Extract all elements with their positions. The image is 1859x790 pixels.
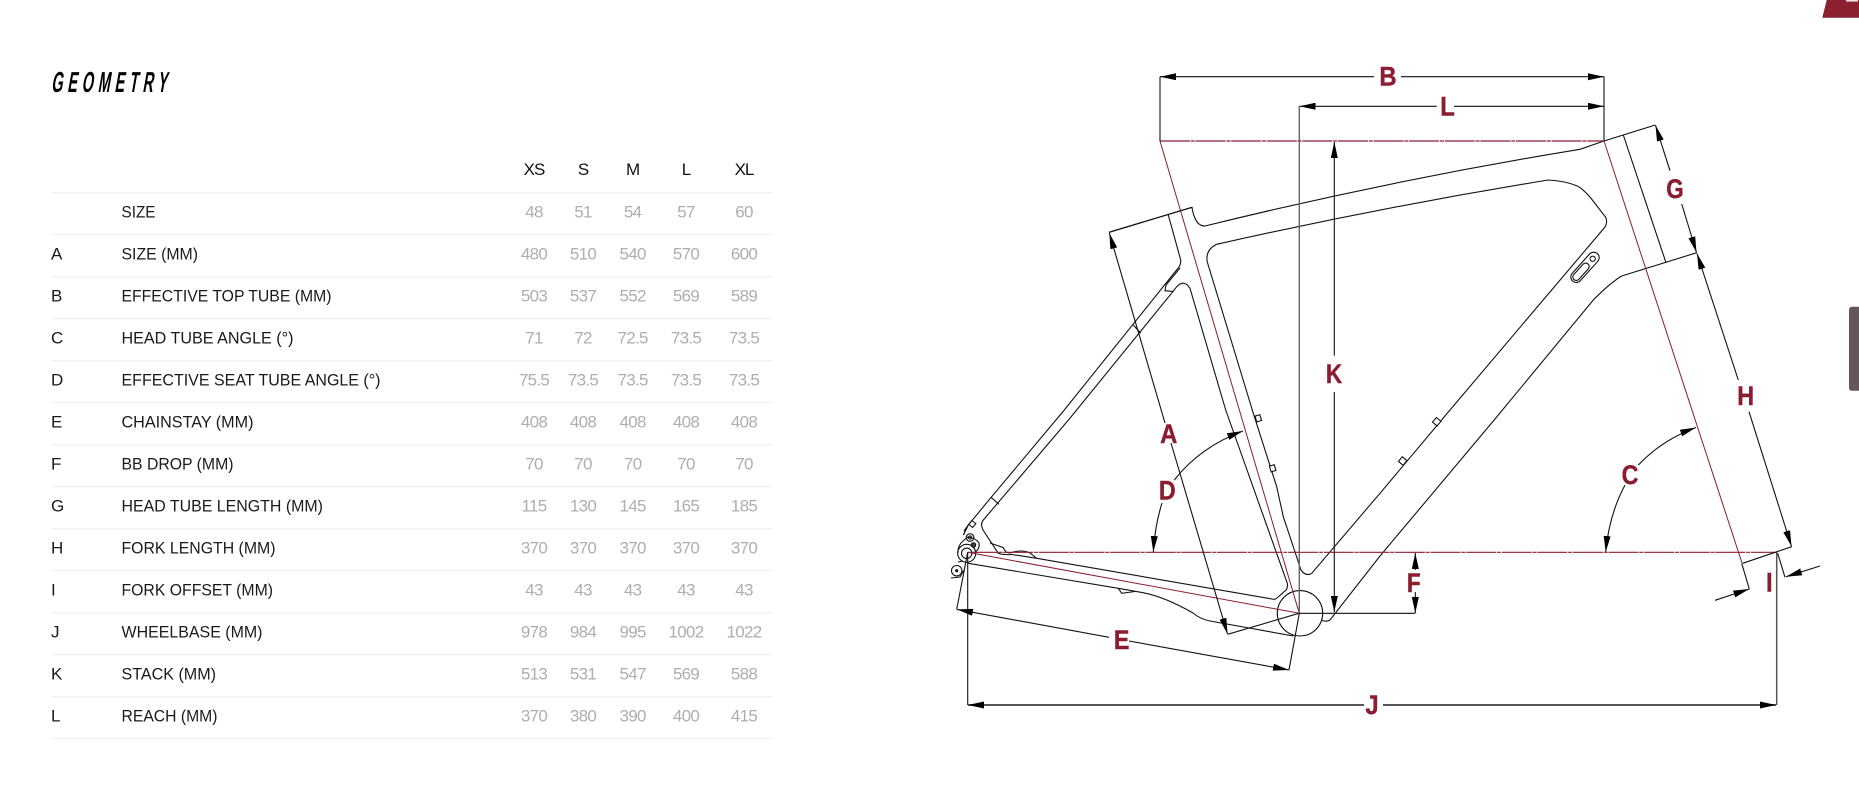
bike frame outline <box>964 125 1697 636</box>
row: J: 984 <box>570 622 596 641</box>
row: D: D <box>51 370 63 389</box>
table header: sizes: L <box>682 160 691 179</box>
row: C: 72 <box>574 328 592 347</box>
rear dropout <box>951 520 979 578</box>
row: C: C <box>51 328 63 347</box>
dimension F: F <box>1407 569 1421 598</box>
row: K <box>51 664 757 683</box>
dimension I <box>1715 547 1820 600</box>
row: C: HEAD TUBE ANGLE (°) <box>122 328 294 347</box>
title: GEOMETRY <box>50 66 176 98</box>
row: L: L <box>51 706 60 725</box>
row: A: 510 <box>570 244 596 263</box>
row: C <box>51 328 759 347</box>
row: K: 531 <box>570 664 596 683</box>
row: size: 60 <box>735 202 753 221</box>
row: G: 185 <box>731 496 757 515</box>
bottle bosses <box>1255 415 1441 472</box>
row: J: 1002 <box>668 622 704 641</box>
row: L: 380 <box>570 706 596 725</box>
dimension C <box>1606 428 1696 552</box>
row: E: 408 <box>521 412 547 431</box>
dimension D <box>1153 431 1243 552</box>
dimension F <box>1299 553 1421 613</box>
row: I: 43 <box>735 580 753 599</box>
table header: sizes: S <box>578 160 589 179</box>
dimension I: I <box>1766 569 1773 598</box>
row: K: 588 <box>731 664 757 683</box>
row: F: 70 <box>735 454 753 473</box>
row: I: 43 <box>525 580 543 599</box>
row: K: K <box>51 664 63 683</box>
row: E: 408 <box>673 412 699 431</box>
row: D: 73.5 <box>671 370 701 389</box>
row: D: 73.5 <box>729 370 759 389</box>
row: H <box>51 538 757 557</box>
row: C: 73.5 <box>729 328 759 347</box>
row: G: 130 <box>570 496 596 515</box>
row: A <box>51 244 757 263</box>
row: J: WHEELBASE (MM) <box>122 622 262 641</box>
dimension A: A <box>1160 420 1177 449</box>
row: F: 70 <box>624 454 642 473</box>
row: E <box>51 412 757 431</box>
row: D <box>51 370 759 389</box>
row: F: 70 <box>574 454 592 473</box>
row: C: 73.5 <box>671 328 701 347</box>
dimension G <box>1656 125 1696 252</box>
row: G: 165 <box>673 496 699 515</box>
row: L: 400 <box>673 706 699 725</box>
row: D: EFFECTIVE SEAT TUBE ANGLE (°) <box>122 370 380 389</box>
dimension B <box>1160 62 1604 141</box>
row: L: 390 <box>619 706 646 725</box>
row: H: 370 <box>619 538 646 557</box>
red centre lines <box>968 141 1777 613</box>
row: G: HEAD TUBE LENGTH (MM) <box>122 496 323 515</box>
row: B: 552 <box>619 286 646 305</box>
row: K: STACK (MM) <box>122 664 216 683</box>
dimension H <box>1697 254 1792 546</box>
row: J: J <box>51 622 60 641</box>
row: size <box>122 202 753 221</box>
row: L: 370 <box>521 706 547 725</box>
row: B: 569 <box>673 286 699 305</box>
row: L: 415 <box>731 706 757 725</box>
row: H: 370 <box>521 538 547 557</box>
dimension K: K <box>1326 360 1342 389</box>
row: G: G <box>51 496 64 515</box>
row: B: EFFECTIVE TOP TUBE (MM) <box>122 286 332 305</box>
row: B: B <box>51 286 62 305</box>
row: A: SIZE (MM) <box>122 244 198 263</box>
row: size: SIZE <box>122 202 156 221</box>
table header: sizes <box>524 160 754 179</box>
row: J <box>51 622 762 641</box>
dimension L: L <box>1440 92 1455 122</box>
row: I: I <box>51 580 56 599</box>
dimension D: D <box>1159 476 1176 506</box>
table header: sizes: XS <box>524 160 545 179</box>
row: I: 43 <box>624 580 642 599</box>
row: I: 43 <box>677 580 695 599</box>
row: G <box>51 496 757 515</box>
row: H: FORK LENGTH (MM) <box>122 538 276 557</box>
row: F: 70 <box>677 454 695 473</box>
row: F: BB DROP (MM) <box>122 454 234 473</box>
dimension G: G <box>1666 175 1684 204</box>
row: J: 978 <box>521 622 547 641</box>
row: E: 408 <box>731 412 757 431</box>
row: A: A <box>51 244 63 263</box>
dimension B: B <box>1379 62 1397 92</box>
dimension A <box>1109 207 1299 634</box>
row: size: 48 <box>525 202 543 221</box>
row: C: 72.5 <box>617 328 648 347</box>
table header: sizes: XL <box>735 160 754 179</box>
row: I: FORK OFFSET (MM) <box>122 580 273 599</box>
row: G: 115 <box>521 496 547 515</box>
row: F: F <box>51 454 61 473</box>
row: G: 145 <box>619 496 646 515</box>
row: J: 995 <box>619 622 646 641</box>
row: D: 75.5 <box>519 370 549 389</box>
dimension H: H <box>1737 382 1754 411</box>
top-right corner tab <box>1822 0 1859 18</box>
row: L <box>51 706 757 725</box>
geometry table <box>51 160 773 739</box>
row: B: 503 <box>521 286 547 305</box>
row: E: 408 <box>619 412 646 431</box>
frame geometry diagram <box>951 62 1820 720</box>
row: F <box>51 454 753 473</box>
row: F: 70 <box>525 454 543 473</box>
row: size: 51 <box>574 202 592 221</box>
row: I <box>51 580 753 599</box>
row: A: 570 <box>673 244 699 263</box>
row: J: 1022 <box>726 622 762 641</box>
row: D: 73.5 <box>617 370 648 389</box>
row: H: 370 <box>570 538 596 557</box>
cable port slot <box>1569 250 1601 285</box>
row: B: 537 <box>570 286 596 305</box>
row: A: 600 <box>731 244 757 263</box>
dimension C: C <box>1622 461 1638 490</box>
row: E: 408 <box>570 412 596 431</box>
row: H: 370 <box>673 538 699 557</box>
row: H: 370 <box>731 538 757 557</box>
table header: sizes: M <box>626 160 639 179</box>
dimension E: E <box>1114 626 1129 655</box>
dimension E <box>957 552 1299 670</box>
row: A: 480 <box>521 244 547 263</box>
row: H: H <box>51 538 63 557</box>
row: I: 43 <box>574 580 592 599</box>
row: B: 589 <box>731 286 757 305</box>
dimension J: J <box>1365 691 1379 720</box>
row: K: 513 <box>521 664 547 683</box>
row: A: 540 <box>619 244 646 263</box>
right-edge scroll handle <box>1849 307 1859 391</box>
row: B <box>51 286 757 305</box>
row: E: CHAINSTAY (MM) <box>122 412 254 431</box>
row: size: 54 <box>624 202 642 221</box>
row: K: 547 <box>619 664 646 683</box>
row: K: 569 <box>673 664 699 683</box>
row: E: E <box>51 412 62 431</box>
row: D: 73.5 <box>568 370 598 389</box>
row: size: 57 <box>677 202 695 221</box>
row: L: REACH (MM) <box>122 706 218 725</box>
row: C: 71 <box>525 328 543 347</box>
